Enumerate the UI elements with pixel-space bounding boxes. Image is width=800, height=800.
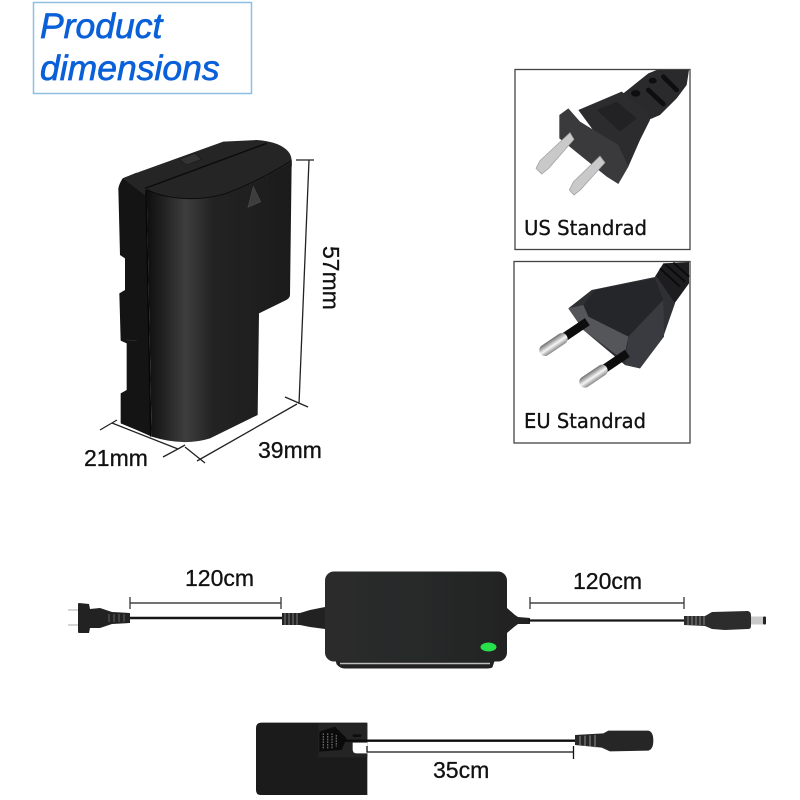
EU plug pins bbox=[537, 317, 591, 358]
dimension: 35cm: 35cm bbox=[433, 757, 489, 783]
dimension: right 120cm bbox=[530, 568, 684, 609]
contact cover detail bbox=[179, 153, 202, 165]
adapter body bbox=[325, 572, 507, 662]
EU label: EU Standrad bbox=[524, 409, 646, 433]
dimension: right 120cm: 120cm bbox=[573, 568, 642, 594]
AC plug bbox=[78, 603, 130, 633]
right cable with DC connector bbox=[507, 608, 766, 633]
EU plug image bbox=[537, 262, 689, 390]
title box bbox=[34, 2, 252, 94]
title text: Product bbox=[40, 6, 164, 46]
coupler slot bbox=[353, 743, 367, 753]
title text bbox=[40, 6, 220, 88]
battery dummy coupler bbox=[256, 723, 653, 795]
battery top face bbox=[123, 140, 292, 207]
adapter bottom lip bbox=[335, 655, 496, 668]
dimension: 57mm: 57mm bbox=[318, 246, 344, 310]
dimension: left 120cm: 120cm bbox=[185, 565, 254, 591]
battery rear rail bbox=[118, 173, 152, 437]
US plug blades bbox=[536, 133, 574, 174]
panel: US plug bbox=[515, 70, 690, 250]
DC connector bbox=[684, 611, 751, 630]
female DC connector bbox=[575, 731, 653, 751]
warning triangle bbox=[248, 187, 261, 207]
dimension: 35cm bbox=[367, 746, 574, 783]
adapter strain relief bbox=[507, 608, 530, 633]
US label: US Standrad bbox=[524, 216, 647, 240]
left strain relief bbox=[282, 607, 325, 629]
left cable with plug bbox=[68, 603, 325, 633]
dimension: 21mm: 21mm bbox=[84, 445, 148, 471]
battery front face bbox=[147, 163, 292, 442]
DC barrel tip bbox=[751, 616, 763, 624]
panel: EU plug bbox=[514, 262, 690, 443]
power adapter bbox=[325, 572, 507, 668]
title text: dimensions bbox=[40, 48, 220, 88]
coupler body bbox=[256, 723, 367, 795]
dimension: 39mm: 39mm bbox=[258, 437, 322, 463]
right cord bbox=[528, 619, 686, 622]
coupler recess bbox=[318, 723, 367, 757]
dimension: left 120cm bbox=[130, 565, 281, 609]
dimension: 57mm bbox=[285, 160, 344, 407]
battery illustration bbox=[118, 140, 292, 442]
coupler cable bbox=[343, 737, 577, 744]
US plug image bbox=[536, 70, 689, 195]
left cord bbox=[128, 617, 284, 619]
green LED bbox=[480, 642, 496, 652]
dimension: 39mm bbox=[185, 404, 322, 463]
dimension: 21mm bbox=[84, 420, 185, 471]
plug blades bbox=[68, 610, 78, 625]
